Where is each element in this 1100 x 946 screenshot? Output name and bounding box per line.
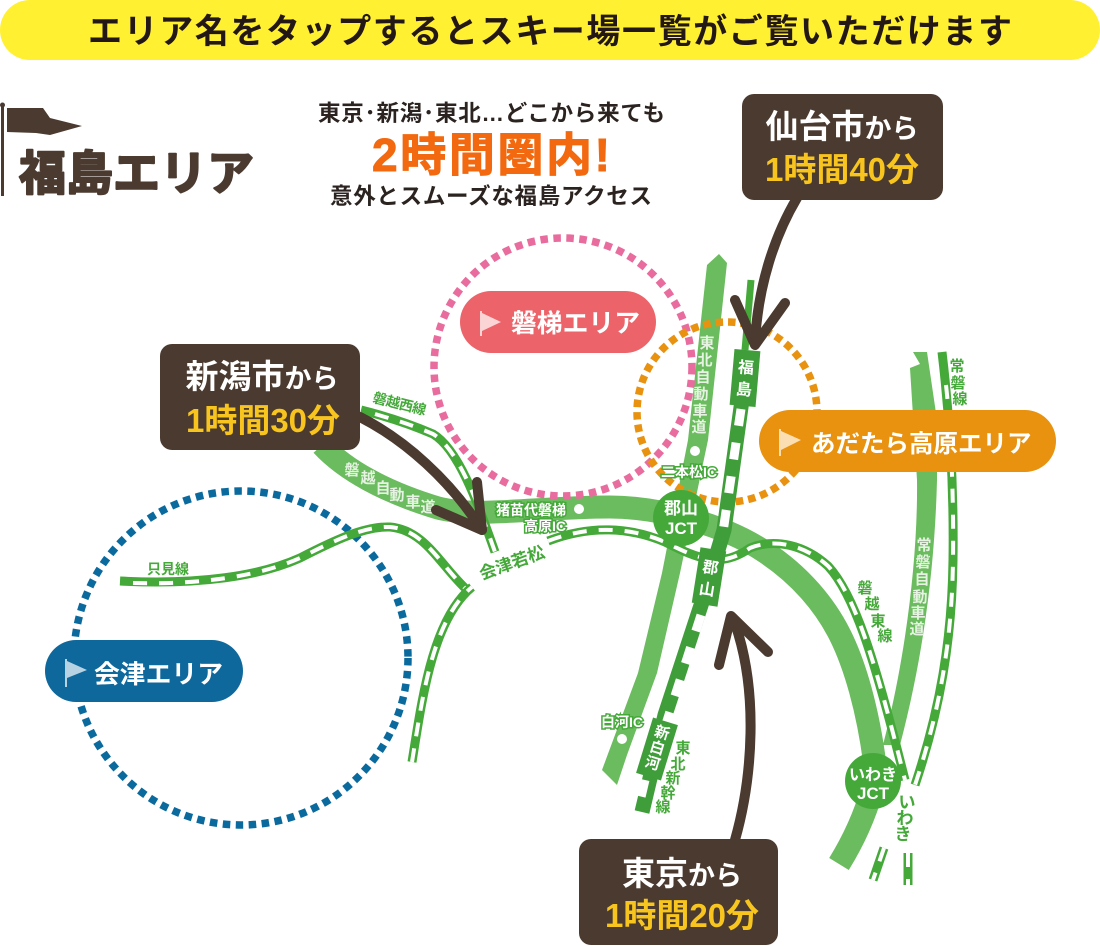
label: Shirakawa IC — [601, 714, 643, 744]
label: Tohoku expressway: 車 — [692, 403, 708, 420]
station: Fukushima: 福 — [737, 358, 755, 378]
junction: Koriyama JCT — [653, 490, 709, 546]
callout: from Sendai: 1時間40分 — [765, 151, 919, 188]
intro copy — [318, 101, 665, 209]
label: Joban line: 線 — [952, 390, 968, 408]
label: Tohoku expressway: 北 — [697, 352, 713, 369]
dotted circle: Bandai — [434, 238, 692, 496]
rail lines — [120, 280, 953, 885]
callout: from Tokyo: 1時間20分 — [605, 897, 759, 934]
road: Ban-etsu expressway — [322, 445, 875, 765]
callout: from Sendai — [742, 94, 943, 200]
label: Ban-etsu east line: 越 — [864, 596, 880, 613]
rail: Tohoku Shinkansen — [641, 280, 751, 812]
callout: from Niigata: 1時間30分 — [186, 402, 340, 439]
junction: Koriyama JCT: 郡山 — [664, 499, 698, 518]
label: Ban-etsu expressway: 自 — [375, 479, 391, 497]
area button: Bandai: 磐梯エリア — [511, 309, 640, 338]
label: Joban expressway: 磐 — [915, 553, 931, 571]
top banner — [0, 0, 1100, 60]
label: Tadami line: 只見線 — [147, 561, 189, 577]
rail: Ban-etsu west line — [361, 410, 495, 552]
label: Inawashiro Bandai Kogen IC: 高原IC — [524, 518, 566, 534]
rail: Joban line — [915, 352, 953, 785]
area button: Adatara: あだたら高原エリア — [811, 430, 1032, 458]
icon: flag — [0, 102, 82, 196]
station: Fukushima: 島 — [735, 379, 753, 400]
label: Aizu-Wakamatsu: 会津若松 — [477, 542, 547, 584]
icon: flag — [65, 659, 87, 687]
label: Joban expressway: 車 — [910, 605, 926, 622]
road: Ban-etsu expressway to Iwaki — [839, 790, 872, 864]
rail: Ban-etsu east line — [548, 530, 905, 780]
label: Inawashiro Bandai Kogen IC: 猪苗代磐梯 — [496, 502, 566, 518]
label: Joban line: 磐 — [950, 374, 966, 392]
dotted circle: Adatara — [637, 322, 817, 502]
arrow: from Niigata — [360, 417, 482, 530]
station: Koriyama: 郡 — [701, 558, 720, 578]
label: Ban-etsu expressway: 動 — [389, 487, 405, 504]
callout: from Tokyo: 東京から — [622, 855, 742, 892]
label: Iwaki: き — [894, 825, 912, 844]
label: Tohoku Shinkansen: 幹 — [660, 784, 676, 802]
label: Ban-etsu expressway: 磐 — [344, 461, 360, 479]
label: Ban-etsu east line: 磐 — [857, 579, 873, 597]
station: Shin-Shirakawa: 河 — [643, 753, 662, 774]
label: Tohoku expressway: 自 — [695, 368, 711, 386]
label: Iwaki: わ — [896, 809, 914, 828]
label: Ban-etsu west line: 磐越西線 — [371, 389, 428, 418]
junction: Koriyama JCT: JCT — [665, 519, 698, 538]
label: Iwaki: い — [898, 793, 916, 812]
callout: from Sendai: 仙台市から — [766, 108, 918, 145]
station: Fukushima — [730, 349, 760, 407]
label: Nihonmatsu IC: 二本松IC — [661, 464, 717, 480]
arrow: from Sendai — [735, 198, 797, 345]
rail: Tadami line — [120, 527, 467, 590]
road network — [322, 254, 937, 864]
label: Ban-etsu east line: 東 — [870, 613, 886, 630]
area button: Bandai — [460, 291, 656, 353]
intro copy: 東京･新潟･東北…どこから来ても — [318, 101, 665, 126]
junction: Iwaki JCT: いわき — [849, 766, 897, 784]
label: Ban-etsu expressway: 道 — [420, 499, 436, 516]
label: Tohoku expressway: 道 — [691, 419, 707, 436]
label: Tohoku Shinkansen: 線 — [655, 798, 671, 816]
top banner: エリア名をタップするとスキー場一覧がご覧いただけます — [88, 12, 1012, 51]
label: Joban expressway: 自 — [914, 570, 930, 588]
icon: flag — [480, 311, 501, 336]
label: Joban expressway: 動 — [912, 589, 928, 606]
station: Shin-Shirakawa: 白 — [647, 737, 667, 759]
label: Tohoku expressway: 動 — [693, 386, 709, 403]
road: Joban expressway — [883, 352, 937, 745]
label: Joban line: 常 — [949, 358, 965, 375]
intro copy: 2時間圏内! — [372, 129, 610, 181]
label: Nihonmatsu IC — [661, 446, 717, 480]
callout: from Niigata — [160, 344, 360, 450]
label: Joban expressway: 常 — [916, 537, 932, 554]
area button: Adatara — [759, 410, 1056, 472]
station: Shin-Shirakawa — [636, 717, 678, 781]
callout: from Tokyo — [579, 839, 778, 945]
area title: Fukushima — [0, 102, 254, 200]
station: Koriyama — [692, 547, 726, 607]
area button: Aizu — [45, 640, 243, 702]
label: Inawashiro Bandai Kogen IC — [496, 502, 584, 534]
rail: Iwaki tail fragments — [873, 848, 908, 885]
station: Shin-Shirakawa: 新 — [652, 723, 671, 744]
dotted circle: Aizu — [74, 491, 408, 825]
rail: Aizu-Wakamatsu line south — [412, 587, 472, 762]
label: Joban expressway: 道 — [909, 621, 925, 638]
label: Ban-etsu expressway: 車 — [405, 494, 421, 511]
label: Tohoku Shinkansen: 東 — [675, 740, 691, 757]
arrow: from Tokyo — [719, 616, 768, 840]
road: Tohoku expressway — [602, 254, 727, 785]
line labels — [147, 358, 968, 844]
label: Ban-etsu east line: 線 — [877, 627, 893, 645]
junction: Iwaki JCT: JCT — [857, 784, 890, 803]
label: Ban-etsu expressway: 越 — [360, 470, 376, 487]
station: Koriyama: 山 — [698, 580, 716, 600]
area button: Aizu: 会津エリア — [94, 660, 223, 689]
heading: 福島エリア — [19, 147, 254, 200]
intro copy: 意外とスムーズな福島アクセス — [330, 183, 652, 209]
callout: from Niigata: 新潟市から — [186, 358, 338, 395]
label: Tohoku expressway: 東 — [699, 335, 715, 352]
label: Shirakawa IC: 白河IC — [601, 714, 643, 730]
junction: Iwaki JCT — [845, 753, 901, 809]
label: Tohoku Shinkansen: 北 — [670, 756, 686, 773]
icon: flag — [779, 429, 801, 456]
label: Tohoku Shinkansen: 新 — [665, 770, 681, 787]
